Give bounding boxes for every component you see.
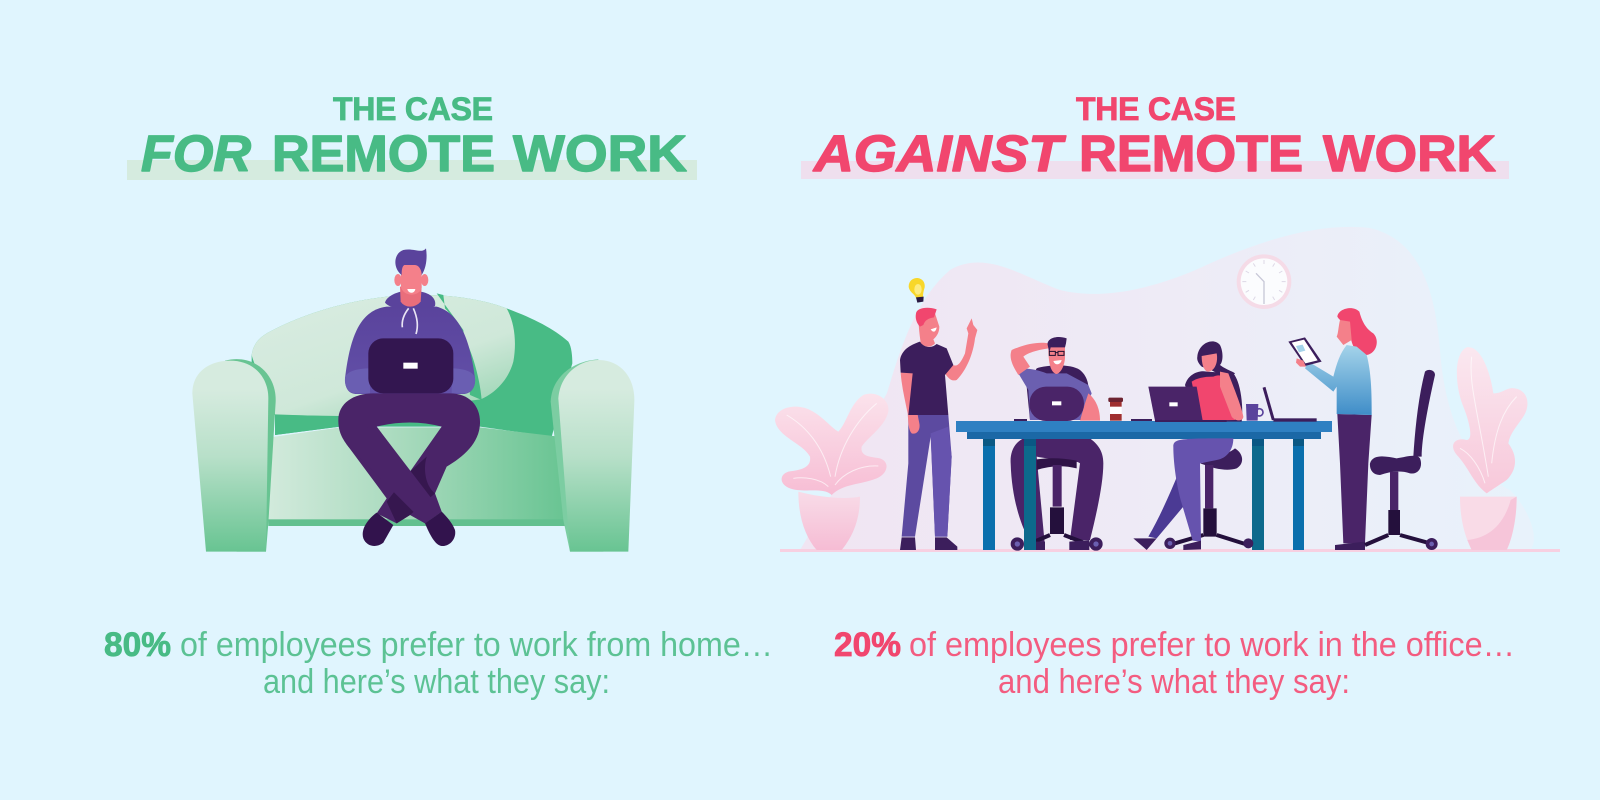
illustration: man with laptop on sofa (192, 248, 634, 552)
text: against remote work statistic: of employees prefer to work in the office… (909, 626, 1515, 664)
sofa (192, 293, 634, 552)
seated woman (1133, 341, 1253, 550)
empty office chair (1365, 370, 1438, 550)
standing woman with tablet (1288, 308, 1377, 550)
heading: the case for remote work (127, 91, 697, 182)
wall clock (1237, 254, 1291, 309)
heading: the case against remote work: THE CASE (1076, 91, 1236, 127)
plant left (775, 394, 888, 550)
text: against remote work statistic (834, 626, 1515, 701)
heading: the case for remote work: THE CASE (333, 91, 493, 127)
text: for remote work statistic: 80% (104, 626, 171, 664)
heading: the case for remote work: REMOTE (272, 125, 495, 182)
mug and laptop on table (1246, 387, 1317, 422)
text: for remote work statistic: of employees prefer to work from home… (180, 626, 773, 664)
text: for remote work statistic (104, 626, 773, 701)
plant right (1453, 347, 1527, 550)
heading: the case against remote work: REMOTE (1079, 125, 1303, 182)
heading: the case against remote work: AGAINST (812, 125, 1066, 182)
heading: the case for remote work: WORK (513, 125, 687, 182)
right section people (1133, 254, 1527, 550)
text: against remote work statistic: 20% (834, 626, 901, 664)
illustration: office team scene (775, 227, 1560, 552)
text: against remote work statistic: and here’s what they say: (998, 663, 1350, 701)
idea bulb (909, 278, 925, 303)
heading: the case for remote work: FOR (141, 125, 251, 182)
heading: the case against remote work (801, 91, 1509, 182)
standing man (900, 308, 977, 550)
floor line (780, 549, 1560, 552)
table (956, 419, 1332, 550)
heading: the case against remote work: WORK (1323, 125, 1496, 182)
background blob (800, 227, 1534, 550)
left section people (775, 278, 1123, 551)
text: for remote work statistic: and here’s what they say: (263, 663, 610, 701)
coffee cup (1108, 398, 1123, 421)
seated man with laptop (1011, 337, 1103, 551)
man in hoodie (338, 248, 480, 546)
